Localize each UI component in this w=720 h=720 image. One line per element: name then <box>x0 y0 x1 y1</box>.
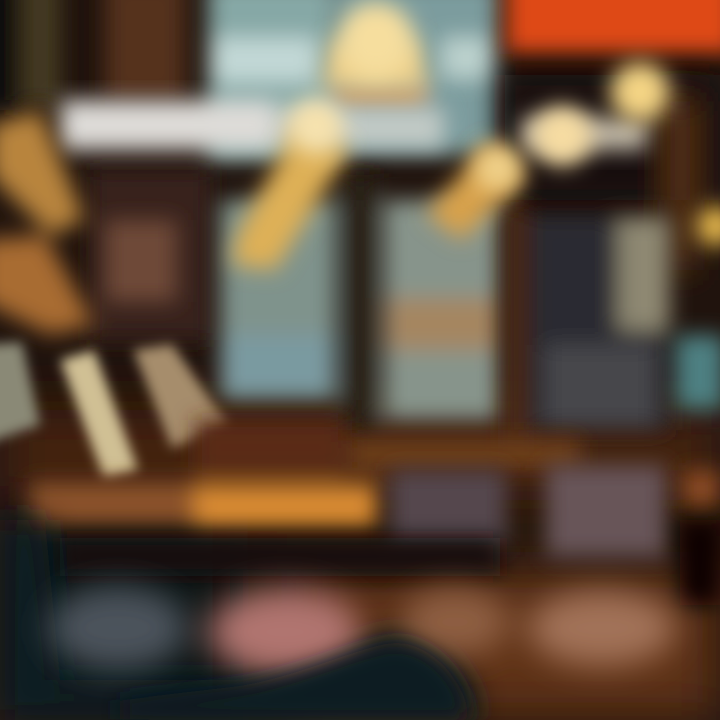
left tan shapes <box>0 110 177 335</box>
left chair slats <box>0 342 228 478</box>
dark band under table <box>60 520 720 605</box>
foreground dark base <box>120 642 470 720</box>
middle windows <box>220 175 500 430</box>
top teal windows <box>208 0 498 160</box>
pendant lamps <box>232 40 526 270</box>
upper right dark area <box>505 75 720 270</box>
dark right panel <box>505 205 670 455</box>
floor and lower wall tones <box>0 410 720 720</box>
upper left wood columns <box>0 0 210 340</box>
right edge accents <box>675 335 720 506</box>
red awning <box>506 0 720 54</box>
lamp glows <box>288 2 720 246</box>
grey cushions <box>390 465 666 557</box>
bottom seats <box>48 586 676 676</box>
foreground dark shape <box>0 520 478 720</box>
table top <box>30 420 580 528</box>
white band <box>60 100 647 150</box>
